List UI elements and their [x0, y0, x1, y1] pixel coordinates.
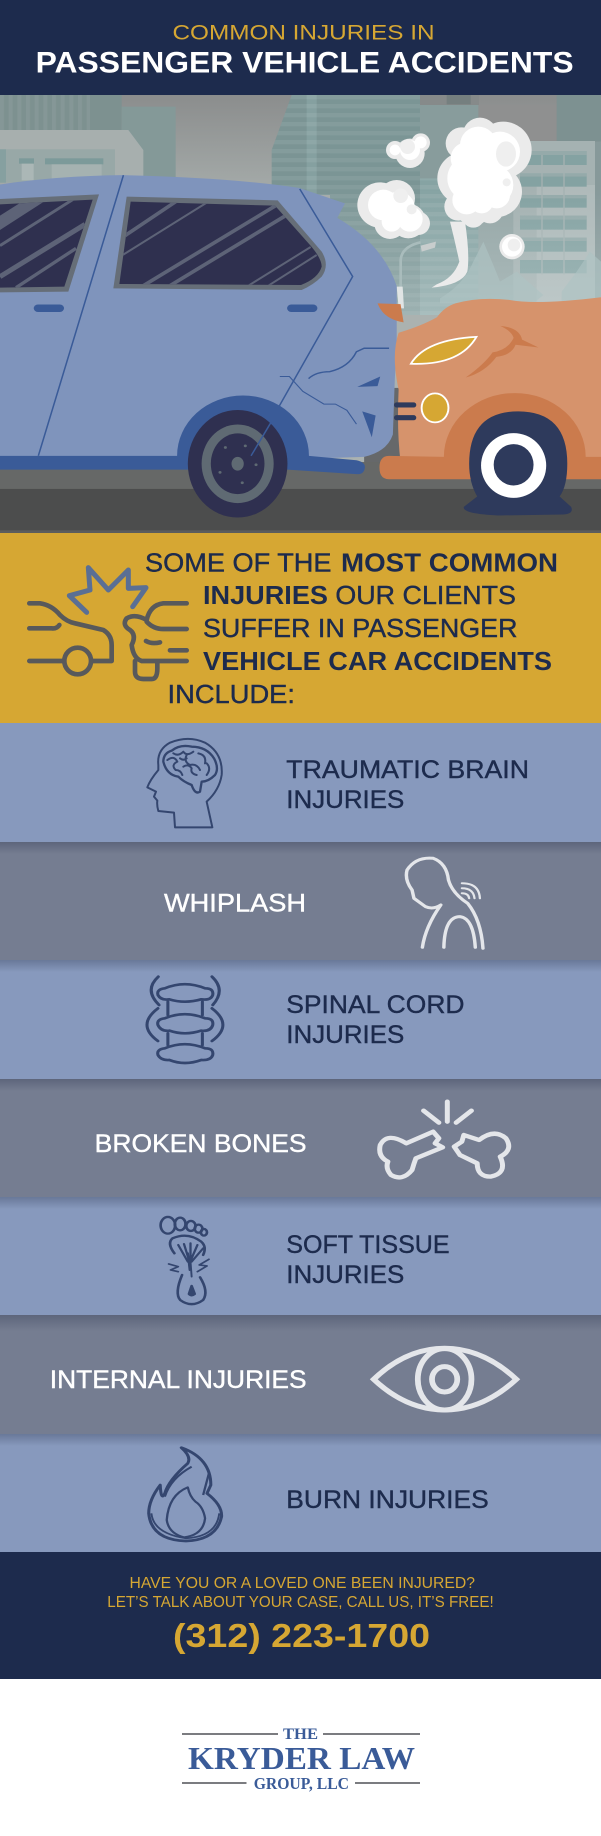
panel: burn injuries [0, 1434, 601, 1552]
tail light [378, 303, 404, 322]
intro text: SUFFER IN PASSENGER [203, 615, 518, 643]
intro text: VEHICLE CAR ACCIDENTS [203, 648, 552, 676]
icon: vertebrae [147, 977, 223, 1063]
label: BROKEN BONES [95, 1130, 307, 1158]
panel: title header [0, 0, 601, 95]
apartment building [514, 141, 595, 274]
icon: brain in head [147, 739, 222, 827]
title line: passenger vehicle accidents: PASSENGER VEHICLE ACCIDENTS [36, 46, 574, 79]
label: TRAUMATIC BRAIN [286, 756, 529, 784]
label: INJURIES [286, 1021, 404, 1049]
label: SOFT TISSUE [286, 1231, 450, 1259]
fog light [422, 393, 448, 422]
label [286, 991, 464, 1049]
blue car wheel [188, 410, 287, 518]
label: SPINAL CORD [286, 991, 464, 1019]
label: INJURIES [286, 786, 404, 814]
panel: spinal cord injuries [0, 960, 601, 1079]
headlight [411, 337, 476, 364]
call to action text: LET’S TALK ABOUT YOUR CASE, CALL US, IT’S FREE! [107, 1594, 494, 1611]
label [286, 1231, 450, 1289]
icon: flame [149, 1448, 222, 1541]
windows [0, 194, 326, 292]
orange car [379, 297, 601, 515]
label [286, 756, 529, 814]
hood crease [466, 326, 539, 378]
label: WHIPLASH [164, 890, 306, 918]
panel: whiplash [0, 842, 601, 961]
title line: common injuries in: COMMON INJURIES IN [172, 20, 434, 45]
icon: neck with pain waves [406, 858, 483, 948]
door seams [38, 175, 353, 456]
dents and cracks [280, 348, 389, 424]
trees [440, 242, 601, 303]
door handles [34, 304, 64, 312]
wheel arch and skirt [0, 395, 365, 474]
city skyline background [0, 95, 601, 315]
logo: the kryder law group: GROUP, LLC [254, 1774, 349, 1793]
road [0, 388, 601, 534]
intro text [145, 550, 558, 709]
label: INJURIES [286, 1261, 404, 1289]
logo: the kryder law group [182, 1726, 420, 1793]
panel: traumatic brain injuries [0, 723, 601, 842]
icon: broken bone [380, 1102, 509, 1177]
intro text: INCLUDE: [168, 681, 295, 709]
icon: eye [374, 1348, 516, 1410]
intro text: INJURIES [203, 582, 328, 610]
label: INTERNAL INJURIES [50, 1366, 307, 1394]
panel: soft tissue injuries [0, 1197, 601, 1315]
blue car [0, 175, 404, 518]
intro text: OUR CLIENTS [335, 582, 516, 610]
logo: the kryder law group: KRYDER LAW [188, 1740, 415, 1776]
panel: broken bones [0, 1079, 601, 1197]
intro text: SOME OF THE [145, 550, 332, 578]
panel: call to action [0, 1552, 601, 1679]
smoke clouds [357, 118, 532, 288]
phone number: (312) 223-1700 [173, 1617, 430, 1654]
flat tire [464, 411, 572, 515]
call to action text: HAVE YOU OR A LOVED ONE BEEN INJURED? [130, 1575, 475, 1592]
logo: the kryder law group: THE [283, 1726, 318, 1743]
intro text: MOST COMMON [341, 550, 558, 578]
icon: car collision [29, 568, 187, 679]
panel: crash illustration [0, 95, 601, 534]
street lamp [397, 242, 436, 308]
label: BURN INJURIES [286, 1486, 489, 1514]
panel: gold intro [0, 533, 601, 723]
panel: internal injuries [0, 1315, 601, 1434]
icon: foot [161, 1217, 209, 1304]
orange wheel arch and skirt [379, 393, 601, 479]
call to action text [107, 1575, 494, 1611]
